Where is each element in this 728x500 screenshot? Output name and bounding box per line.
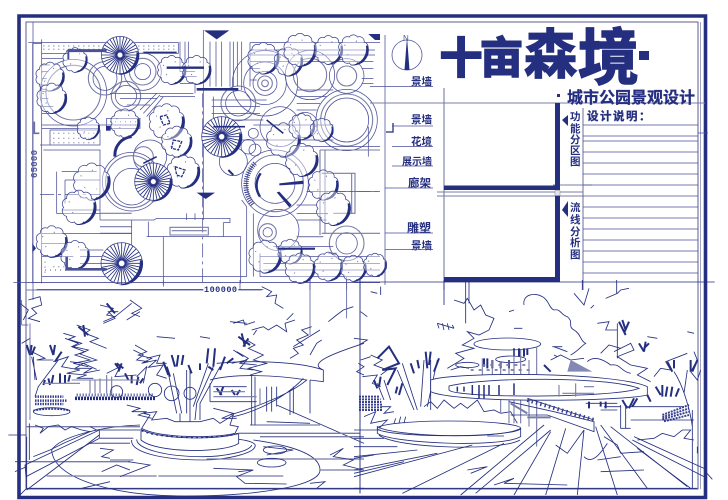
vertical dimension: 65000: 65000 (30, 150, 40, 178)
plan labels (370, 75, 433, 252)
left sketch wall planter (8, 423, 364, 497)
right sketch distant shrubs (359, 397, 694, 421)
subtitle: 城市公园景观设计 (567, 88, 695, 107)
title: 十 (440, 35, 482, 82)
site plan (13, 30, 387, 290)
zoning diagram label: 功 (570, 110, 580, 123)
left sketch palm trunks (32, 357, 220, 422)
left sketch pavilion and ramp (210, 343, 364, 443)
title: 森 (524, 26, 577, 85)
right sketch stair bridge (509, 398, 631, 432)
title: 境 (578, 24, 639, 92)
zoning diagram label: 图 (570, 156, 580, 168)
left sketch shrub band (33, 375, 196, 416)
circulation diagram label: 析 (570, 236, 581, 249)
spoked trees (101, 36, 242, 285)
design notes heading: 设计说明： (587, 109, 652, 123)
cloud trees (36, 33, 387, 284)
circulation diagram label: 流 (570, 201, 581, 214)
horizontal dimension: 100000: 100000 (204, 285, 237, 295)
plan labels: 景墙 (411, 75, 432, 88)
title (440, 24, 649, 92)
north arrow (392, 34, 422, 70)
north arrow: N (403, 34, 409, 43)
title: 亩 (480, 35, 523, 83)
right panel grid (370, 88, 708, 290)
right sketch ring structure (431, 338, 647, 447)
right sketch paving lines (354, 280, 715, 495)
zoning diagram label: 能 (570, 122, 581, 135)
dark plan accents (32, 30, 380, 269)
plan corner mark (386, 123, 393, 132)
plan linework (13, 30, 380, 290)
zoning diagram label (562, 110, 581, 168)
right sketch stray marks (371, 287, 562, 357)
plan labels: 景墙 (411, 113, 432, 126)
left sketch tree canopies (20, 287, 364, 418)
left sketch palm leaves (27, 303, 250, 395)
vertical extension lines (33, 22, 385, 300)
right sketch canopy outline (354, 288, 701, 453)
plan labels: 景墙 (411, 239, 432, 252)
right perspective sketch (354, 280, 715, 495)
right sketch trunks (377, 323, 617, 410)
plan labels: 雕塑 (407, 221, 431, 235)
plan labels: 廊架 (408, 176, 431, 190)
circulation diagram label: 分 (570, 225, 581, 238)
circulation diagram label: 图 (570, 249, 580, 261)
zoning diagram label: 分 (570, 133, 581, 146)
left sketch plaza (27, 425, 364, 496)
left perspective sketch (8, 280, 364, 497)
circulation diagram label (562, 201, 581, 261)
circulation diagram label: 线 (570, 213, 581, 226)
left sketch planter (132, 412, 255, 460)
right sketch planter (377, 417, 521, 447)
plan labels: 花境 (411, 135, 432, 148)
plan ring circles (40, 50, 377, 261)
flower beds in plaza (160, 115, 185, 177)
left sketch dimension links (22, 280, 364, 493)
right sketch palm leaves (374, 320, 697, 408)
zoning diagram label: 区 (570, 145, 581, 157)
plan labels: 展示墙 (402, 155, 432, 168)
circular feature with steps (115, 137, 308, 217)
